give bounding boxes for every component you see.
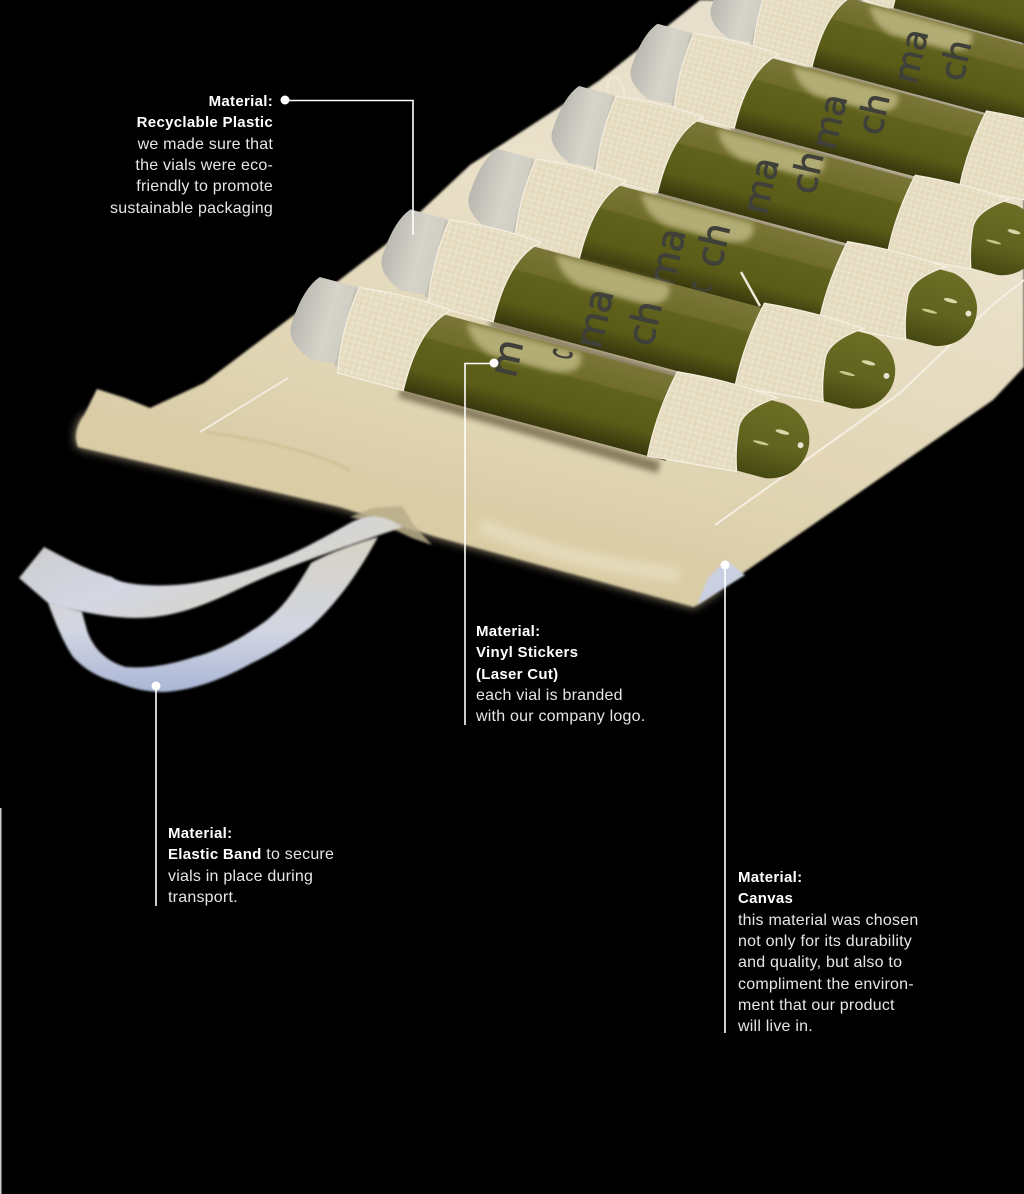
callout: canvas: will live in.	[738, 1018, 813, 1035]
vial 6: ma	[886, 25, 937, 87]
callout: canvas: and quality, but also to	[738, 954, 902, 971]
leader: vinyl stickers	[465, 358, 498, 725]
vial 7	[783, 0, 1024, 112]
vial 6	[700, 0, 1024, 173]
vial 4: ch	[783, 147, 833, 198]
elastic: upper strand	[19, 516, 403, 618]
callout: elastic band: Material:	[168, 825, 232, 842]
callout: elastic band	[168, 825, 334, 906]
vial 3: ma	[639, 224, 695, 291]
left edge rule	[0, 808, 2, 1194]
vial 2: ma	[566, 284, 622, 352]
vial 3: ch	[686, 219, 739, 271]
callout: elastic band: Elastic Band to secure	[168, 846, 334, 863]
vial 1: m	[481, 335, 532, 381]
callout: recyclable plastic: Recyclable Plastic	[137, 114, 273, 131]
callout: recyclable plastic: sustainable packaging	[110, 200, 273, 217]
callout: vinyl stickers: Vinyl Stickers	[476, 644, 578, 661]
canvas roll body	[76, 0, 1024, 607]
leader: recyclable plastic	[280, 96, 413, 235]
thread	[741, 272, 760, 306]
callout: canvas: not only for its durability	[738, 933, 912, 950]
vial 5	[620, 17, 1024, 237]
callout: canvas	[738, 869, 918, 1035]
callout: elastic band: vials in place during	[168, 868, 313, 885]
vial 5: ma	[805, 90, 856, 153]
callout: recyclable plastic: friendly to promote	[136, 178, 273, 195]
callout: recyclable plastic: the vials were eco-	[135, 157, 273, 174]
leader: elastic band	[152, 682, 160, 906]
vial 6: ch	[932, 36, 980, 85]
callout: canvas: ment that our product	[738, 997, 895, 1014]
vial 4	[540, 79, 1024, 304]
vial 4: ma	[735, 154, 788, 218]
callout: recyclable plastic: we made sure that	[138, 136, 273, 153]
callout: vinyl stickers: with our company logo.	[476, 708, 645, 725]
thread loop	[608, 77, 624, 100]
vial 3	[457, 141, 987, 376]
callout: recyclable plastic	[110, 93, 273, 217]
callout: recyclable plastic: Material:	[209, 93, 273, 110]
callout: canvas: compliment the environ-	[738, 976, 914, 993]
callout: vinyl stickers	[476, 623, 645, 725]
callout: elastic band: transport.	[168, 889, 238, 906]
leader: canvas	[720, 560, 730, 1033]
vial 5: ch	[850, 90, 899, 139]
vial 1: c	[541, 345, 581, 363]
vial 2	[370, 200, 906, 439]
elastic: lower strand	[48, 537, 378, 692]
callout: vinyl stickers: (Laser Cut)	[476, 666, 558, 683]
elastic band loop	[19, 516, 403, 692]
callout: vinyl stickers: each vial is branded	[476, 687, 623, 704]
callout: canvas: Material:	[738, 869, 802, 886]
callout: vinyl stickers: Material:	[476, 623, 540, 640]
vial 1	[279, 269, 820, 509]
callout: canvas: Canvas	[738, 890, 793, 907]
vial 2: ch	[618, 297, 671, 350]
vial 2: c	[680, 278, 720, 296]
callout: canvas: this material was chosen	[738, 912, 918, 929]
